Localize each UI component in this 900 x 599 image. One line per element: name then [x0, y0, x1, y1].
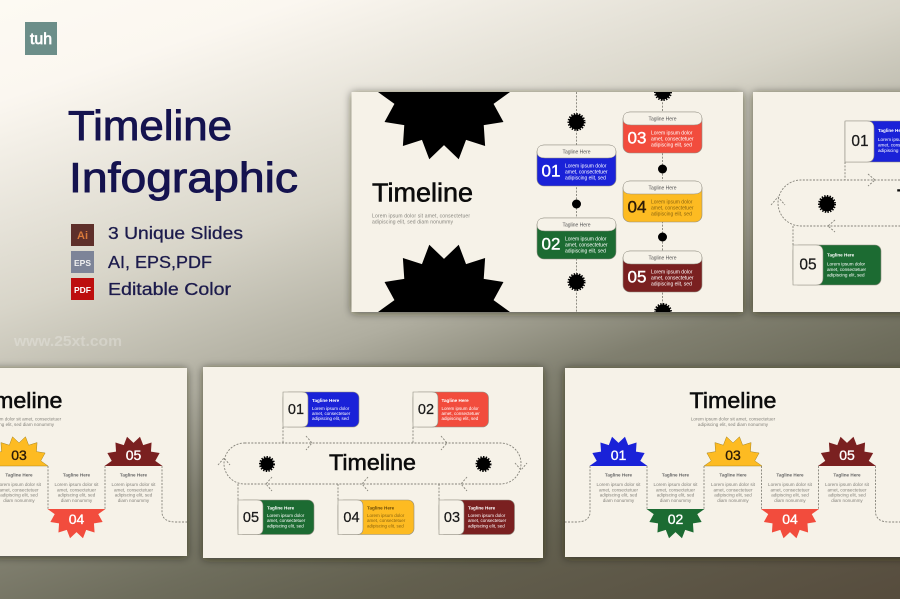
- feature list: [71, 223, 243, 300]
- timeline spines: [576, 92, 662, 312]
- panel: slide 3 starburst timeline cropped: [0, 368, 187, 556]
- icon: PDF: PDF: [74, 285, 91, 295]
- column 01 text: Tagline Here: [605, 472, 633, 478]
- top starburst: [378, 92, 510, 159]
- column 04 text: diam nonummy: [61, 498, 93, 503]
- column 04 text: Lorem ipsum dolor sit: [55, 482, 99, 487]
- card 02: Tagline Here: [562, 223, 591, 229]
- card 02: adipiscing elit, sed: [442, 416, 479, 421]
- main title: [68, 102, 298, 201]
- column 04 text: adipiscing elit, sed: [771, 493, 809, 498]
- column 02 text: Lorem ipsum dolor sit: [654, 482, 698, 487]
- card 01: adipiscing elit, sed: [565, 176, 606, 182]
- panel: slide 4 loop timeline: [203, 367, 543, 558]
- card 05: Tagline Here: [648, 256, 677, 262]
- slide title: Timeline: [329, 450, 416, 475]
- column 03 text: [0, 472, 42, 503]
- card 05: Tagline Here: [267, 506, 295, 510]
- column 01 text: adipiscing elit, sed: [600, 493, 638, 498]
- column 04 text: [55, 472, 99, 503]
- watermark: www.25xt.com: [13, 334, 122, 350]
- star 04: 04: [69, 511, 84, 527]
- star 04: [47, 509, 106, 538]
- star 03: [704, 437, 762, 466]
- card 01: 01: [542, 162, 560, 180]
- card 01: amet, consectetuer: [312, 411, 351, 416]
- card 05: amet, consectetuer: [267, 518, 306, 523]
- card 04: amet, consectetuer: [651, 206, 694, 212]
- star 05: 05: [839, 447, 855, 463]
- feature: colour: Editable Color: [108, 279, 231, 299]
- column 01 text: [597, 472, 641, 503]
- card 02: Lorem ipsum dolor: [442, 406, 479, 411]
- card 05: [793, 245, 881, 285]
- card 05: Tagline Here: [827, 252, 855, 258]
- bottom starburst: [378, 245, 510, 312]
- column 02 text: Tagline Here: [662, 472, 690, 478]
- card 05: [238, 500, 314, 534]
- icon: Ai: Ai: [77, 230, 88, 242]
- card 01: [537, 145, 616, 186]
- card 03: Tagline Here: [468, 506, 496, 510]
- star 03: 03: [11, 447, 27, 463]
- icon: PDF: [71, 278, 94, 300]
- card 03: adipiscing elit, sed: [468, 523, 505, 528]
- card 02: 02: [542, 234, 560, 254]
- slide subtitle: [372, 214, 470, 226]
- card 02: [537, 218, 616, 259]
- column 05 text: amet, consectetuer: [114, 487, 153, 492]
- card 05: amet, consectetuer: [651, 276, 694, 282]
- column 04 text: diam nonummy: [774, 498, 806, 503]
- column 05 text: Tagline Here: [120, 472, 148, 478]
- column 01 text: amet, consectetuer: [599, 487, 638, 492]
- card 04: 04: [628, 198, 646, 216]
- card 04: [623, 181, 702, 222]
- card 03: [439, 500, 514, 534]
- card 02: amet, consectetuer: [442, 411, 480, 416]
- star 05: 05: [126, 447, 141, 463]
- loop track with arrows: [218, 427, 527, 500]
- card 01: Tagline Here: [312, 398, 340, 403]
- column 01 text: Lorem ipsum dolor sit: [597, 482, 641, 487]
- card 04: adipiscing elit, sed: [651, 212, 692, 218]
- connectors: [565, 466, 900, 522]
- slide subtitle: Lorem ipsum dolor sit amet, consectetuer: [691, 416, 776, 422]
- column 05 text: diam nonummy: [831, 498, 863, 503]
- star 05: [104, 437, 162, 466]
- card 01: [283, 392, 359, 427]
- slide title: Timeline: [690, 388, 776, 413]
- panel: slide 2 loop timeline cropped: [753, 92, 900, 312]
- column 03 text: adipiscing elit, sed: [714, 493, 752, 498]
- card 05: 05: [243, 510, 259, 526]
- card 02: 02: [418, 402, 434, 418]
- column 03 text: Tagline Here: [719, 472, 747, 478]
- column 03 text: Tagline Here: [5, 472, 33, 478]
- card 01: adipiscing elit, sed: [312, 416, 349, 421]
- gears and dots: [569, 84, 670, 320]
- card 04: [338, 500, 414, 534]
- card 03: adipiscing elit, sed: [651, 142, 692, 148]
- column 05 text: [825, 472, 870, 503]
- column 05 text: Lorem ipsum dolor sit: [825, 482, 870, 487]
- column 03 text: Lorem ipsum dolor sit: [711, 482, 756, 487]
- column 04 text: adipiscing elit, sed: [58, 493, 96, 498]
- icon: EPS: [71, 251, 94, 273]
- column 05 text: diam nonummy: [118, 498, 150, 503]
- slide subtitle: [691, 416, 776, 427]
- card 02: amet, consectetuer: [565, 242, 608, 248]
- gears: [260, 458, 490, 470]
- column 04 text: Lorem ipsum dolor sit: [768, 482, 813, 487]
- column 05 text: adipiscing elit, sed: [828, 493, 866, 498]
- column 03 text: diam nonummy: [3, 498, 35, 503]
- column 03 text: [711, 472, 756, 503]
- column 04 text: amet, consectetuer: [770, 487, 810, 492]
- card 04: Lorem ipsum dolor: [651, 200, 693, 206]
- slide subtitle: Lorem ipsum dolor sit amet, consectetuer: [372, 214, 470, 220]
- card 03: 03: [444, 510, 460, 526]
- slide subtitle: adipiscing elit, sed diam nonummy: [698, 422, 769, 427]
- card 04: Lorem ipsum dolor: [367, 513, 405, 518]
- column 04 text: amet, consectetuer: [57, 487, 96, 492]
- card 03: amet, consectetuer: [468, 518, 507, 523]
- column 04 text: Tagline Here: [63, 472, 91, 478]
- star 04: [761, 509, 819, 538]
- column 01 text: diam nonummy: [603, 498, 635, 503]
- card 04: Tagline Here: [648, 186, 677, 192]
- star 03: 03: [725, 447, 741, 463]
- card 05: adipiscing elit, sed: [651, 282, 692, 288]
- column 05 text: Lorem ipsum dolor sit: [112, 482, 156, 487]
- star 01: [590, 437, 648, 466]
- card 04: adipiscing elit, sed: [367, 523, 404, 528]
- card 01: 01: [851, 133, 869, 150]
- slide subtitle: [0, 416, 62, 427]
- panel: slide 1 vertical timeline: [352, 84, 743, 320]
- logo badge: tuh: [30, 31, 52, 48]
- card 01: Tagline Here: [562, 150, 591, 156]
- star 02: 02: [668, 511, 683, 527]
- card 04: Tagline Here: [367, 506, 395, 510]
- card 05: 05: [628, 268, 646, 286]
- gear: [820, 196, 834, 212]
- column 02 text: [654, 472, 698, 503]
- star 05: [818, 437, 876, 466]
- card 05: [623, 251, 702, 292]
- card 05: adipiscing elit, sed: [827, 272, 865, 278]
- card 01: amet, consectetuer: [565, 170, 608, 176]
- icon: Ai: [71, 224, 94, 246]
- card 05: Lorem ipsum dolor: [651, 270, 693, 276]
- panel: slide 5 starburst timeline: [565, 368, 900, 557]
- star 01: 01: [611, 447, 626, 463]
- card 04: amet, consectetuer: [367, 518, 406, 523]
- column 05 text: adipiscing elit, sed: [115, 493, 153, 498]
- card 05: Lorem ipsum dolor: [267, 513, 305, 518]
- card 02: Tagline Here: [442, 398, 469, 403]
- column 03 text: diam nonummy: [717, 498, 749, 503]
- slide subtitle: adipiscing elit, sed diam nonummy: [372, 220, 454, 226]
- column 03 text: adipiscing elit, sed: [0, 493, 38, 498]
- card 03: Tagline Here: [648, 117, 677, 123]
- card 01: 01: [288, 402, 304, 418]
- column 05 text: amet, consectetuer: [827, 487, 867, 492]
- card 01: Lorem ipsum dolor: [312, 406, 350, 411]
- main title: Timeline: [68, 102, 232, 149]
- main title: Infographic: [69, 154, 298, 201]
- star 03: [0, 437, 48, 466]
- card 03: amet, consectetuer: [651, 136, 694, 142]
- star 02: [646, 509, 704, 538]
- card 04: 04: [343, 510, 360, 526]
- card 05: amet, consectetuer: [827, 267, 867, 272]
- feature: formats: AI, EPS,PDF: [108, 252, 212, 272]
- card 02: Lorem ipsum dolor: [565, 236, 607, 242]
- feature: slides: 3 Unique Slides: [108, 223, 243, 243]
- card 03: [623, 112, 702, 153]
- column 04 text: [768, 472, 813, 503]
- card 03: 03: [628, 128, 646, 148]
- column 05 text: [112, 472, 156, 503]
- star 04: 04: [782, 511, 798, 527]
- card 01: Lorem ipsum dolor: [565, 164, 607, 170]
- icon: EPS: EPS: [74, 258, 91, 268]
- column 03 text: amet, consectetuer: [0, 487, 39, 492]
- column 02 text: diam nonummy: [660, 498, 692, 503]
- card 01: [845, 121, 900, 162]
- slide title: Timeline: [372, 180, 473, 208]
- card 02: [413, 392, 488, 427]
- column 04 text: Tagline Here: [776, 472, 804, 478]
- card 05: 05: [799, 256, 817, 274]
- column 03 text: amet, consectetuer: [713, 487, 753, 492]
- column 02 text: amet, consectetuer: [656, 487, 695, 492]
- card 02: adipiscing elit, sed: [565, 248, 606, 254]
- column 02 text: adipiscing elit, sed: [657, 493, 695, 498]
- loop track: [771, 162, 900, 245]
- logo badge: [25, 22, 57, 55]
- card 05: adipiscing elit, sed: [267, 523, 304, 528]
- connectors: [48, 466, 187, 522]
- column 05 text: Tagline Here: [833, 472, 861, 478]
- card 05: Lorem ipsum dolor: [827, 262, 866, 266]
- card 03: Lorem ipsum dolor: [651, 130, 693, 136]
- card 03: Lorem ipsum dolor: [468, 513, 506, 518]
